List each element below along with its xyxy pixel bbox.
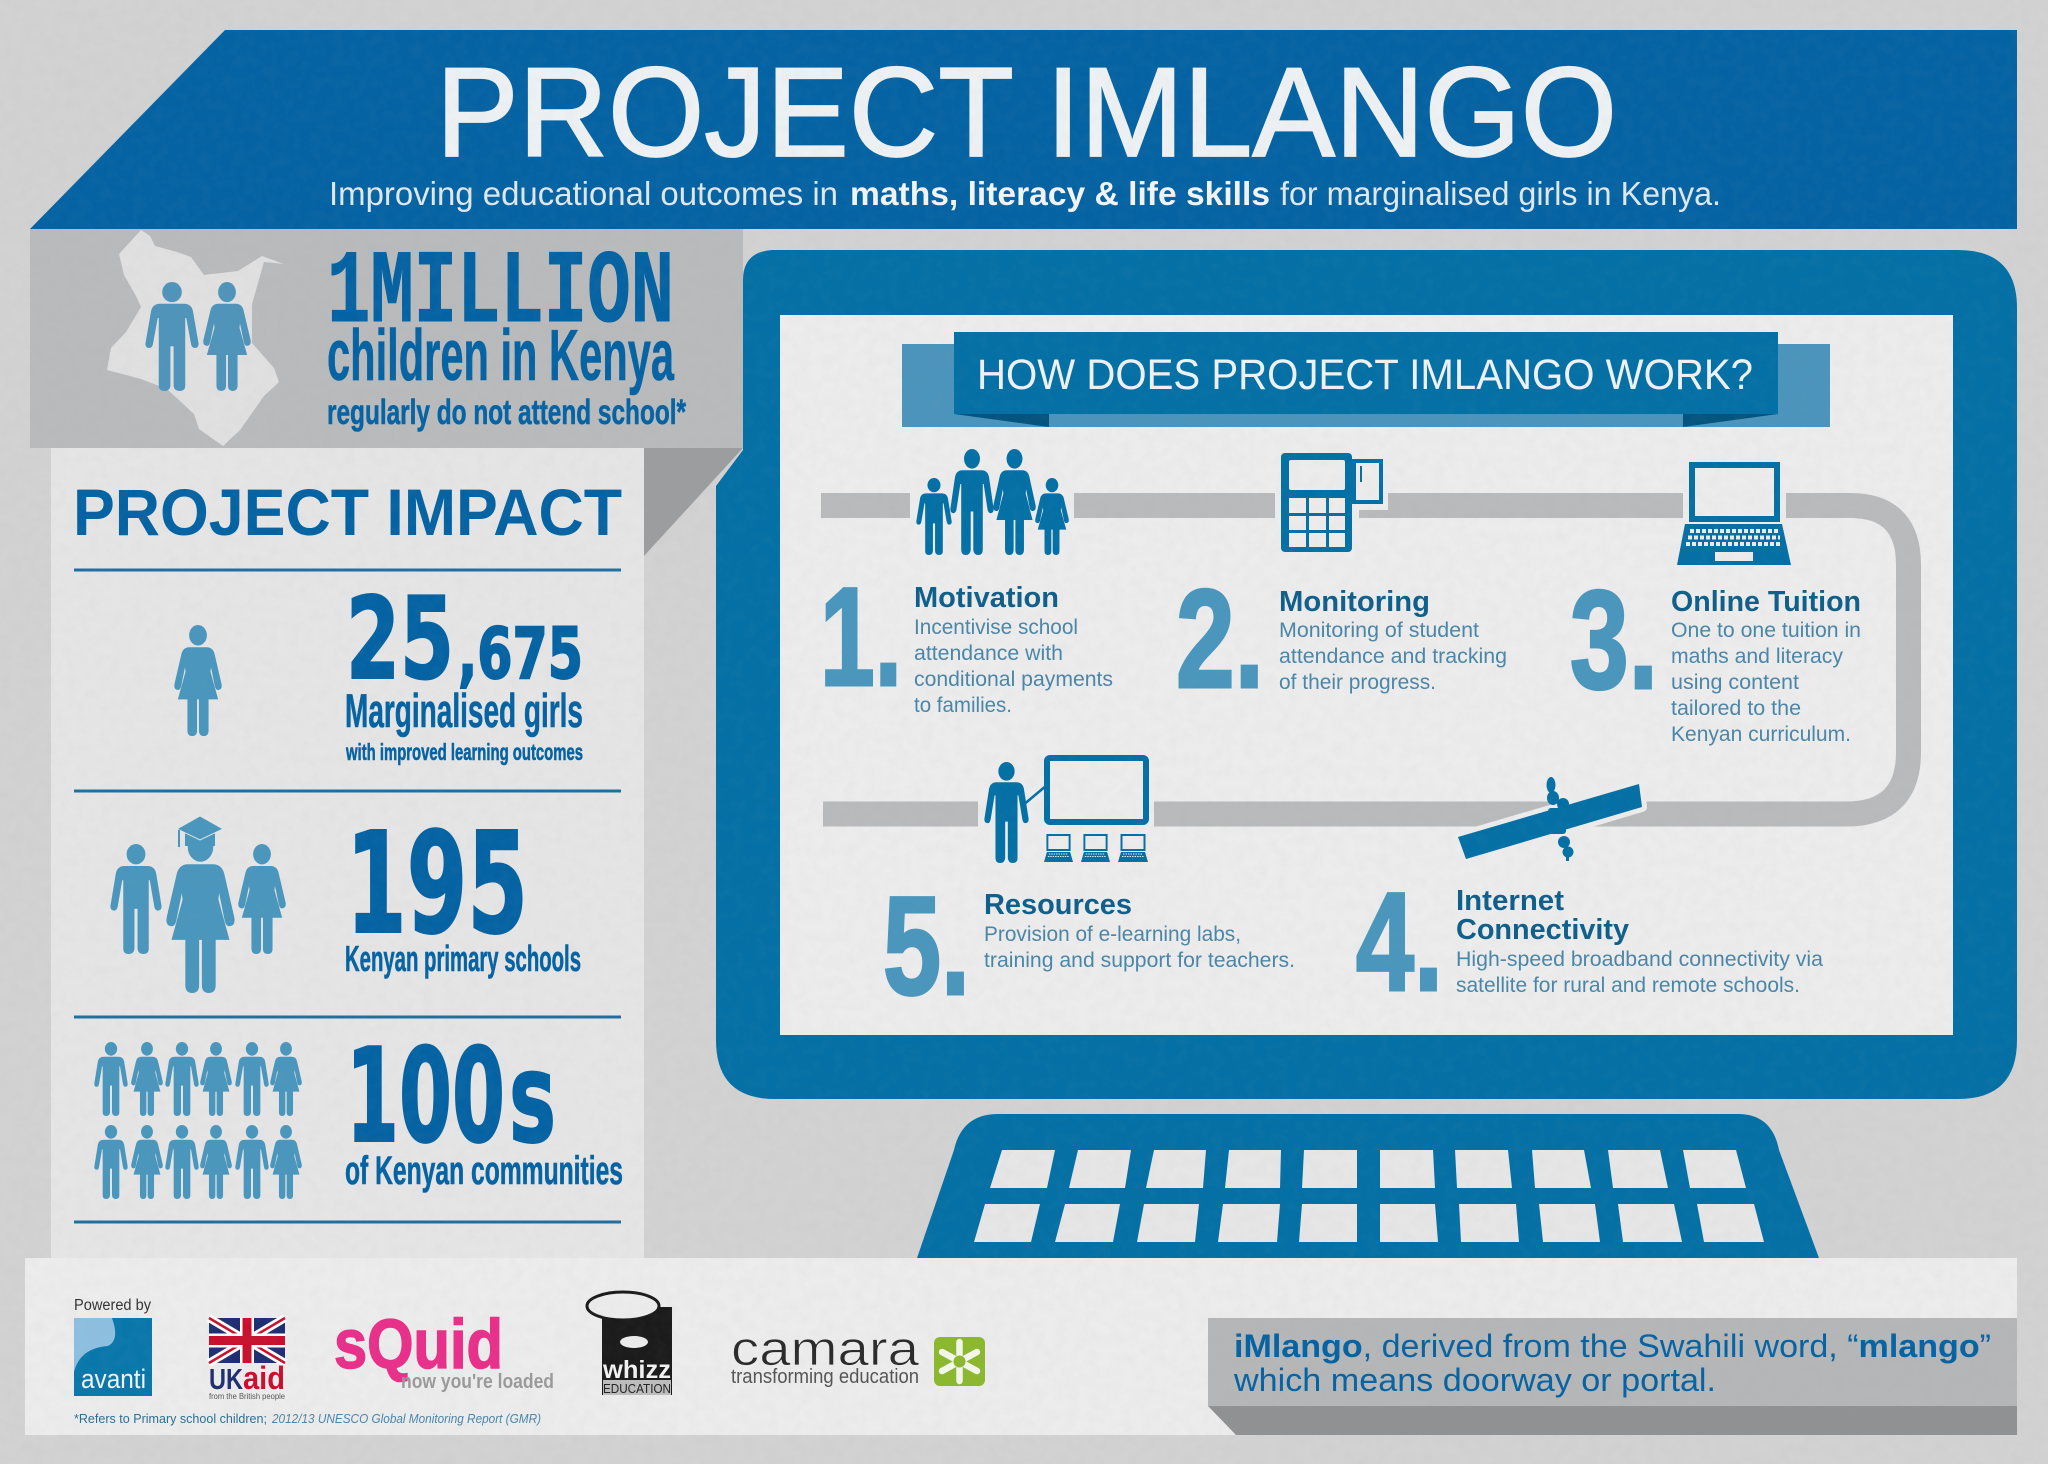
step 1: to families. [914, 693, 1012, 717]
logo: UK aid: aid [243, 1360, 285, 1396]
icon: teacher and e-learning lab [984, 758, 1148, 863]
process pipe [821, 506, 1908, 814]
logo: UK aid [209, 1318, 286, 1401]
stat: marginalised girls: 25 [346, 573, 454, 705]
step 4: High-speed broadband connectivity via [1456, 947, 1823, 971]
footnote [74, 1411, 541, 1426]
step 1: Incentivise school [914, 615, 1078, 639]
logo: whizz education: EDUCATION [603, 1381, 671, 1396]
headline note: regularly do not attend school* [327, 393, 686, 432]
step 2 [1176, 560, 1507, 717]
monitor screen [780, 315, 1953, 1035]
step 3: Kenyan curriculum. [1671, 722, 1851, 746]
headline figure: 1MILLION [327, 235, 674, 353]
logo: camara [731, 1323, 985, 1388]
title: PROJECT IMLANGO [436, 41, 1617, 183]
step 4: satellite for rural and remote schools. [1456, 973, 1800, 997]
step 5: Provision of e-learning labs, [984, 922, 1241, 946]
panel: project impact [51, 448, 743, 1260]
step 2: Monitoring of student [1279, 618, 1479, 642]
stat: communities [94, 1020, 623, 1199]
logo: whizz education [587, 1292, 672, 1396]
step 4: Internet [1456, 885, 1564, 917]
step 2: Monitoring [1279, 586, 1430, 618]
icon: calculator and card [1281, 453, 1381, 552]
callout: meaning of iMlango: which means doorway or portal. [1233, 1362, 1716, 1398]
step 3: tailored to the [1671, 696, 1801, 720]
stat: marginalised girls: ,675 [458, 613, 583, 695]
stat: primary schools: Kenyan primary schools [345, 938, 581, 979]
stat: communities: 100 [346, 1020, 505, 1172]
icon: family [916, 449, 1069, 555]
step 5: training and support for teachers. [984, 948, 1295, 972]
step 1: attendance with [914, 641, 1063, 665]
step 5: Resources [984, 889, 1132, 921]
callout: meaning of iMlango: iMlango, derived from the Swahili word, “ mlango” [1234, 1328, 1991, 1364]
icon: satellite [1458, 777, 1642, 861]
step 4: 4. [1356, 863, 1443, 1020]
step 3 [1570, 561, 1861, 746]
logo: UK aid: from the British people [209, 1392, 286, 1401]
icon: laptop [1677, 465, 1791, 565]
step 3: One to one tuition in [1671, 618, 1861, 642]
logo: sQuid: sQuid [334, 1305, 503, 1383]
headline label: children in Kenya [327, 316, 675, 396]
stat: marginalised girls [174, 573, 583, 765]
step 3: Online Tuition [1671, 586, 1861, 618]
step 4 [1356, 863, 1823, 1020]
subtitle: Improving educational outcomes in [329, 175, 838, 212]
logo: UK aid: UK [209, 1364, 243, 1396]
step 3: 3. [1570, 561, 1658, 718]
step 1: conditional payments [914, 667, 1113, 691]
step 2: 2. [1176, 560, 1264, 717]
panel: 1 million statistic [30, 229, 743, 448]
logo: whizz education: whizz [602, 1356, 671, 1384]
title banner [30, 30, 2017, 229]
impact heading: PROJECT IMPACT [73, 475, 622, 549]
banner heading: HOW DOES PROJECT IMLANGO WORK? [977, 351, 1753, 399]
panel: footer [25, 1258, 2017, 1435]
stat: communities: of Kenyan communities [345, 1149, 623, 1193]
step 1: Motivation [914, 582, 1059, 614]
stat: primary schools [110, 803, 581, 993]
map of Kenya [107, 230, 284, 446]
step 3: using content [1671, 670, 1799, 694]
subtitle: for marginalised girls in Kenya. [1280, 175, 1721, 212]
step 2: of their progress. [1279, 670, 1436, 694]
step 1 [820, 558, 1113, 717]
logo: camara: camara [731, 1323, 919, 1376]
logo: avanti [74, 1318, 152, 1396]
subtitle: maths, literacy & life skills [850, 175, 1270, 212]
monitor frame [716, 250, 2017, 1099]
stat: communities: s [509, 1027, 556, 1171]
step 1: 1. [820, 558, 902, 715]
logo: avanti: avanti [81, 1364, 146, 1394]
footnote: *Refers to Primary school children; [74, 1411, 267, 1426]
keyboard [917, 1114, 1819, 1258]
logo: camara: transforming education [731, 1366, 919, 1388]
step 4: Connectivity [1456, 914, 1629, 946]
subtitle [329, 175, 1721, 212]
footnote: 2012/13 UNESCO Global Monitoring Report (GMR) [271, 1411, 541, 1426]
step 5 [883, 867, 1295, 1024]
step 2: attendance and tracking [1279, 644, 1507, 668]
stat: primary schools: 195 [346, 803, 528, 966]
stat: marginalised girls: Marginalised girls [345, 684, 583, 737]
powered by label: Powered by [74, 1297, 151, 1314]
step 3: maths and literacy [1671, 644, 1843, 668]
step 5: 5. [883, 867, 970, 1024]
stat: marginalised girls: with improved learning outcomes [345, 739, 583, 765]
how it works banner [902, 332, 1830, 427]
logo: sQuid: now you're loaded [401, 1371, 554, 1393]
callout: meaning of iMlango [1208, 1318, 2017, 1435]
